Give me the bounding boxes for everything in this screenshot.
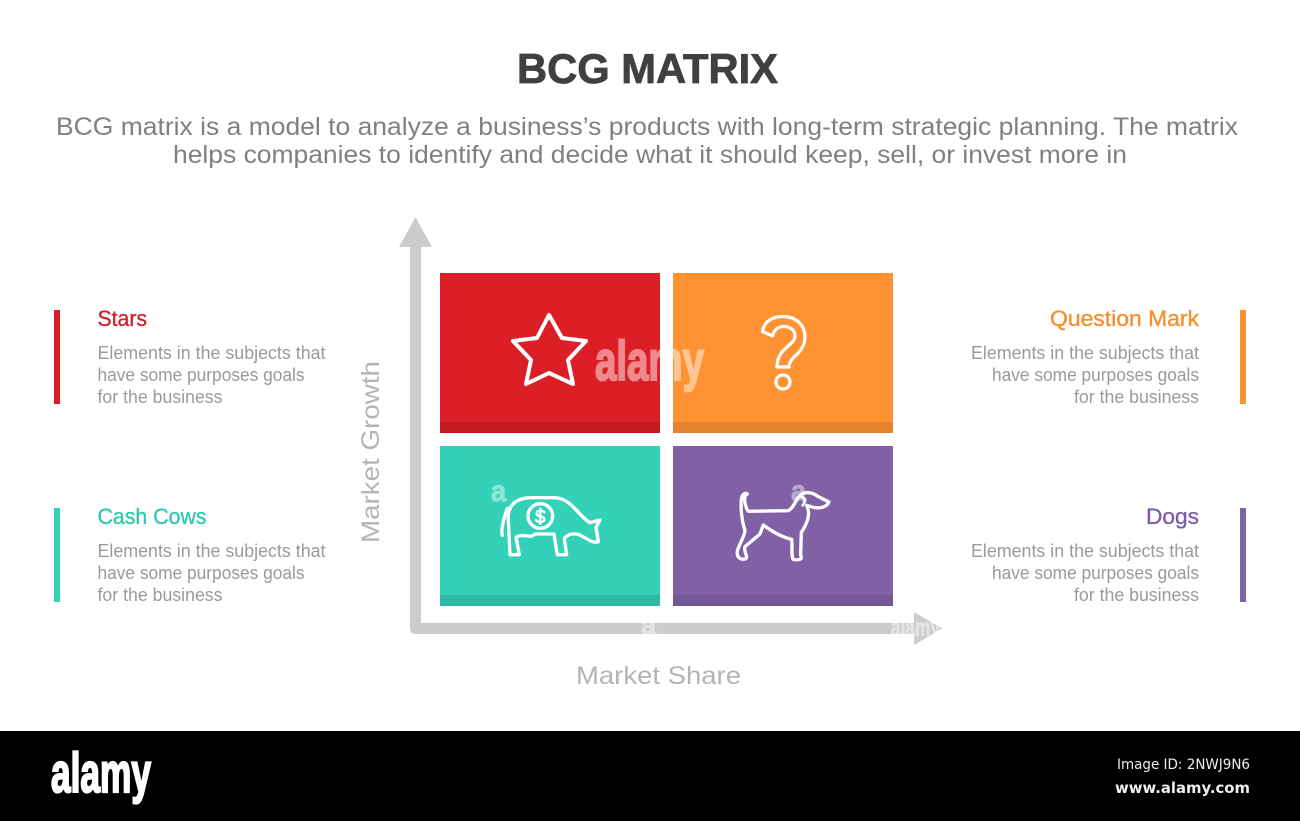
image id: Image ID: 2NWJ9N6 [1117,757,1250,773]
panel: dogs description: have some purposes goals [992,563,1199,583]
panel: stars description: have some purposes goals [98,365,304,385]
watermark: small letters: a [641,610,657,640]
panel: dogs description [971,504,1246,605]
icon: cow with dollar coin [502,498,600,555]
icon: question mark [762,316,805,389]
subtitle text block [56,113,1239,169]
panel: question mark quadrant [673,273,893,433]
subtitle text block: helps companies to identify and decide what it should keep, sell, or invest more in [173,141,1127,169]
panel: dogs description: Elements in the subjects that [971,541,1199,561]
watermark: small letters: a [791,475,806,508]
arrow: market growth and market share axes [399,217,942,645]
panel: question mark description: have some purposes goals [992,365,1199,385]
watermark: small letters [491,475,940,642]
panel: cash cows description: for the business [98,585,222,605]
panel: question mark description: Elements in the subjects that [971,343,1199,363]
icon: star [513,315,586,384]
logo: alamy: alamy [51,741,151,804]
subtitle text block: BCG matrix is a model to analyze a business’s products with long-term strategic planning. The matrix [56,113,1239,141]
panel: dogs quadrant [673,446,893,606]
panel: stars description: Elements in the subjects that [98,343,326,363]
panel: cash cows description: Elements in the subjects that [98,541,326,561]
panel: dogs description: Dogs [1146,504,1199,529]
website: www.alamy.com [1115,779,1250,797]
panel: dogs description: for the business [1074,585,1199,605]
panel: cash cows description: have some purposes goals [98,563,304,583]
panel: question mark description: for the business [1074,387,1199,407]
watermark: small letters: alamy [891,612,940,642]
panel: question mark description [971,306,1246,407]
panel: stars quadrant [440,273,660,433]
panel: cash cows quadrant [440,446,660,606]
axis label: market growth: Market Growth [357,361,385,543]
panel: question mark description: Question Mark [1050,306,1200,331]
panel: stars description: for the business [98,387,222,407]
axis label: market share: Market Share [576,662,741,690]
icon: dog [737,493,829,560]
watermark: small letters: a [491,475,506,508]
panel: cash cows description [54,504,326,605]
title: BCG MATRIX [517,45,778,92]
footer bar [0,731,1300,821]
panel: cash cows description: Cash Cows [98,504,206,529]
panel: stars description: Stars [98,306,147,331]
panel: stars description [54,306,326,407]
watermark: center alamy: alamy [595,329,704,392]
